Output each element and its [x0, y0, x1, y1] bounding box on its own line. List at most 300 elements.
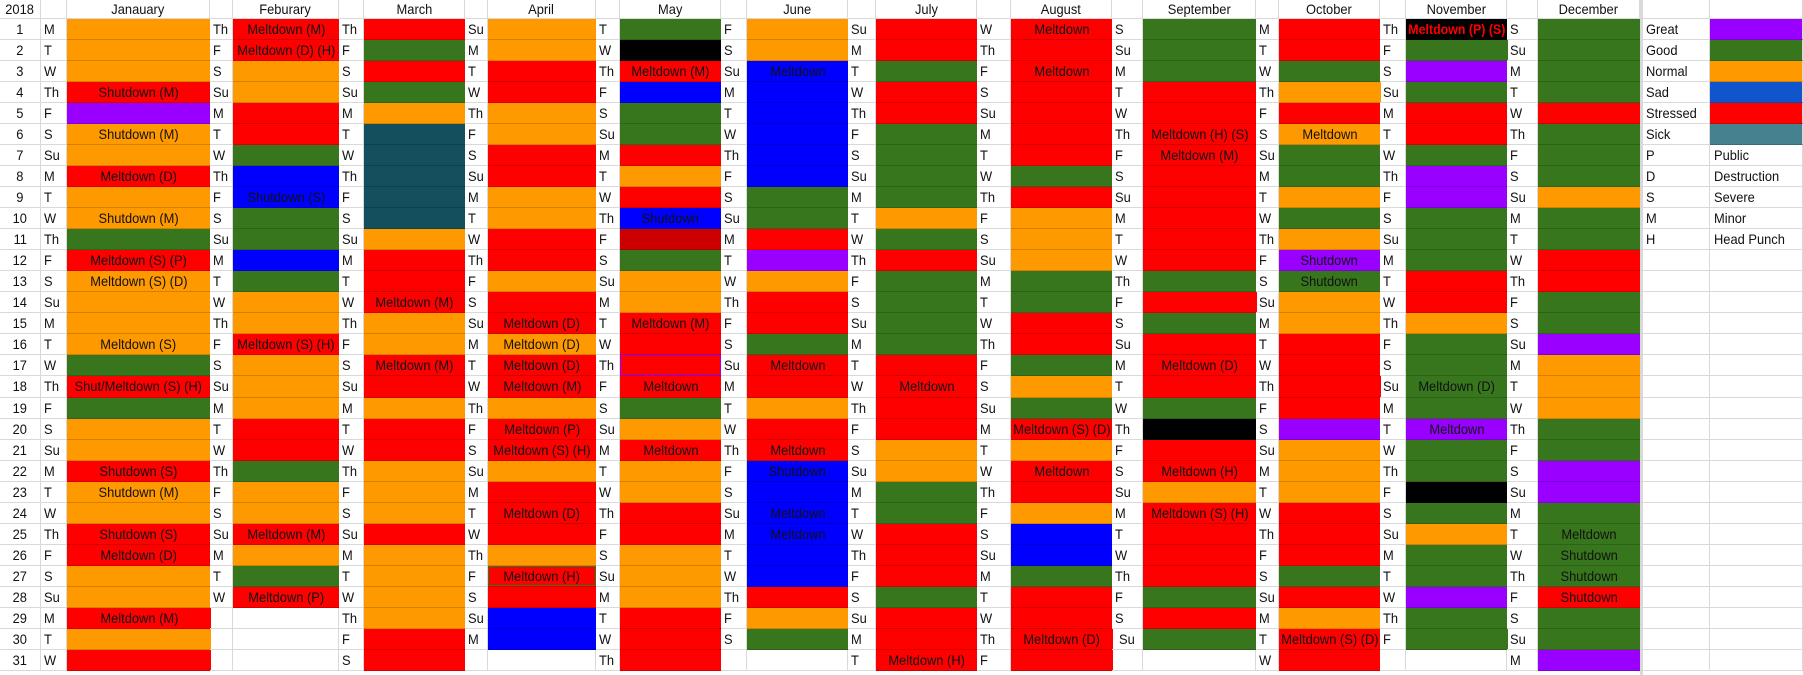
May weekdays: Su	[599, 420, 615, 436]
March weekdays: S	[342, 652, 351, 668]
row numbers column: 16	[13, 336, 27, 352]
legend labels: H	[1646, 230, 1655, 246]
November weekdays: W	[1383, 294, 1395, 310]
March weekdays: S	[342, 504, 351, 520]
February weekdays: M	[213, 400, 224, 416]
September weekdays: S	[1115, 314, 1124, 330]
October mood cells: Shutdown	[1301, 252, 1358, 268]
row numbers column: 18	[13, 378, 27, 394]
March weekdays	[339, 0, 364, 671]
March weekdays: F	[342, 336, 350, 352]
November weekdays: T	[1383, 420, 1391, 436]
May weekdays: S	[599, 104, 608, 120]
July mood cells: Meltdown (H)	[888, 652, 965, 668]
February weekdays: W	[213, 294, 225, 310]
October weekdays: M	[1259, 20, 1270, 36]
March weekdays: Th	[342, 610, 357, 626]
August mood cells: Meltdown (S) (D)	[1013, 420, 1110, 436]
September mood cells: Meltdown (M)	[1160, 146, 1238, 162]
row numbers column: 9	[16, 188, 24, 204]
August weekdays: Th	[980, 484, 995, 500]
April weekdays	[465, 0, 488, 671]
September weekdays: Th	[1115, 420, 1130, 436]
May mood cells	[620, 0, 721, 671]
August weekdays: F	[980, 210, 988, 226]
April weekdays: F	[468, 126, 476, 142]
August weekdays: W	[980, 314, 992, 330]
November weekdays: S	[1383, 62, 1392, 78]
March weekdays: M	[342, 104, 353, 120]
December weekdays: M	[1510, 504, 1521, 520]
May weekdays: W	[599, 336, 611, 352]
July weekdays: S	[851, 294, 860, 310]
April weekdays: W	[468, 526, 480, 542]
August weekdays: W	[980, 610, 992, 626]
March weekdays: F	[342, 630, 350, 646]
September weekdays: T	[1115, 526, 1123, 542]
July weekdays: T	[851, 62, 859, 78]
March weekdays: T	[342, 420, 350, 436]
December weekdays: W	[1510, 104, 1522, 120]
July weekdays: F	[851, 568, 859, 584]
February weekdays: Su	[213, 526, 229, 542]
November weekdays: T	[1383, 568, 1391, 584]
row numbers column	[0, 0, 41, 671]
May mood cells: Meltdown (M)	[631, 314, 709, 330]
January weekdays: W	[44, 356, 56, 372]
April weekdays: S	[468, 442, 477, 458]
October weekdays: W	[1259, 210, 1271, 226]
panel: April	[465, 0, 596, 671]
April mood cells: Meltdown (S) (H)	[493, 442, 591, 458]
October weekdays: Th	[1259, 84, 1274, 100]
November weekdays: Th	[1383, 314, 1398, 330]
March weekdays: Su	[342, 230, 358, 246]
August weekdays: Th	[980, 188, 995, 204]
February weekdays: Th	[213, 168, 228, 184]
November mood cells: Meltdown (D)	[1418, 378, 1495, 394]
July weekdays: W	[851, 378, 863, 394]
January weekdays: Su	[44, 588, 60, 604]
November weekdays: Th	[1383, 610, 1398, 626]
May weekdays: S	[599, 546, 608, 562]
panel: August	[977, 0, 1113, 671]
March weekdays: Th	[342, 462, 357, 478]
March weekdays: T	[342, 568, 350, 584]
August mood cells: August	[1041, 0, 1081, 16]
legend labels: P	[1646, 146, 1655, 162]
March weekdays: M	[342, 400, 353, 416]
January mood cells: Shutdown (M)	[98, 126, 179, 142]
October weekdays: S	[1259, 420, 1268, 436]
October weekdays	[1256, 0, 1279, 671]
July weekdays	[848, 0, 876, 671]
August mood cells: Meltdown (D)	[1024, 630, 1100, 646]
February weekdays: Su	[213, 378, 229, 394]
legend swatches and definitions: Destruction	[1714, 168, 1779, 184]
June mood cells: Shutdown	[769, 462, 826, 478]
July weekdays: Su	[851, 462, 867, 478]
panel: July	[848, 0, 977, 671]
November weekdays: Th	[1383, 462, 1398, 478]
September weekdays: Su	[1119, 630, 1135, 646]
February weekdays: S	[213, 62, 222, 78]
April weekdays: Th	[468, 546, 483, 562]
November weekdays: Th	[1383, 168, 1398, 184]
row numbers column: 5	[16, 104, 24, 120]
May weekdays: T	[599, 20, 607, 36]
October weekdays: Th	[1259, 230, 1274, 246]
January weekdays: M	[44, 314, 55, 330]
August weekdays	[977, 0, 1011, 671]
May weekdays: S	[599, 400, 608, 416]
April mood cells: Meltdown (D)	[504, 356, 580, 372]
April weekdays: Su	[468, 20, 484, 36]
December weekdays: M	[1510, 356, 1521, 372]
August weekdays: Su	[980, 546, 996, 562]
panel: May	[596, 0, 721, 671]
March weekdays: Su	[342, 526, 358, 542]
May weekdays: Th	[599, 356, 614, 372]
February mood cells: Shutdown (S)	[247, 188, 325, 204]
March weekdays: Su	[342, 378, 358, 394]
October weekdays: Th	[1259, 378, 1274, 394]
August weekdays: T	[980, 442, 988, 458]
March weekdays: S	[342, 62, 351, 78]
September weekdays: F	[1115, 588, 1123, 604]
July weekdays: M	[851, 484, 862, 500]
March weekdays: T	[342, 272, 350, 288]
September weekdays: F	[1115, 146, 1123, 162]
January weekdays: T	[44, 188, 52, 204]
November weekdays: Su	[1383, 378, 1399, 394]
February weekdays: M	[213, 546, 224, 562]
row numbers column: 26	[13, 546, 27, 562]
April weekdays: M	[468, 42, 479, 58]
row numbers column: 17	[13, 356, 27, 372]
July weekdays: Su	[851, 20, 867, 36]
May weekdays: M	[599, 442, 610, 458]
March weekdays: Th	[342, 168, 357, 184]
December weekdays: Th	[1510, 568, 1525, 584]
March weekdays: T	[342, 126, 350, 142]
November weekdays: F	[1383, 630, 1391, 646]
August weekdays: Th	[980, 630, 995, 646]
August weekdays: S	[980, 230, 989, 246]
January weekdays: Th	[44, 230, 59, 246]
October mood cells	[1279, 0, 1381, 671]
April weekdays: T	[468, 62, 476, 78]
April weekdays: Th	[468, 252, 483, 268]
October mood cells: Meltdown (S) (D)	[1281, 630, 1378, 646]
December weekdays: Su	[1510, 188, 1526, 204]
April weekdays: Su	[468, 314, 484, 330]
row numbers column: 4	[16, 84, 24, 100]
September mood cells: Meltdown (S) (H)	[1151, 504, 1248, 520]
December weekdays: S	[1510, 462, 1519, 478]
April weekdays: Th	[468, 400, 483, 416]
January mood cells: Meltdown (D)	[100, 546, 177, 562]
September mood cells: Meltdown (D)	[1161, 356, 1238, 372]
January weekdays: S	[44, 568, 53, 584]
June mood cells: Meltdown	[770, 526, 825, 542]
January weekdays: Th	[44, 526, 59, 542]
May mood cells: May	[658, 0, 682, 16]
September weekdays: S	[1115, 20, 1124, 36]
September weekdays: T	[1115, 84, 1123, 100]
February weekdays: Th	[213, 20, 228, 36]
row numbers column: 31	[13, 652, 27, 668]
legend labels: M	[1646, 210, 1657, 226]
December weekdays: W	[1510, 546, 1522, 562]
April weekdays: F	[468, 420, 476, 436]
September weekdays: T	[1115, 378, 1123, 394]
January weekdays: F	[44, 252, 52, 268]
January weekdays: T	[44, 484, 52, 500]
October weekdays: T	[1259, 42, 1267, 58]
July weekdays: T	[851, 210, 859, 226]
June weekdays: Su	[724, 210, 740, 226]
April weekdays: T	[468, 356, 476, 372]
May weekdays: Th	[599, 504, 614, 520]
August weekdays: S	[980, 378, 989, 394]
December weekdays: S	[1510, 314, 1519, 330]
May mood cells: Meltdown	[643, 442, 698, 458]
January weekdays: Su	[44, 294, 60, 310]
April weekdays: Su	[468, 168, 484, 184]
row numbers column: 24	[13, 504, 27, 520]
December weekdays: T	[1510, 230, 1518, 246]
September weekdays: M	[1115, 62, 1126, 78]
November weekdays	[1380, 0, 1406, 671]
September weekdays: Su	[1115, 336, 1131, 352]
February weekdays: S	[213, 504, 222, 520]
September mood cells: September	[1167, 0, 1230, 16]
October weekdays: Su	[1259, 294, 1275, 310]
May weekdays: W	[599, 42, 611, 58]
March weekdays: M	[342, 252, 353, 268]
January weekdays: F	[44, 400, 52, 416]
April mood cells: Meltdown (H)	[504, 568, 580, 584]
May weekdays: S	[599, 252, 608, 268]
July weekdays: S	[851, 146, 860, 162]
February mood cells: Feburary	[260, 0, 311, 16]
April mood cells: Meltdown (M)	[503, 378, 581, 394]
May weekdays: Th	[599, 210, 614, 226]
July weekdays: M	[851, 630, 862, 646]
February weekdays: S	[213, 210, 222, 226]
February mood cells: Meltdown (S) (H)	[237, 336, 335, 352]
November weekdays: S	[1383, 210, 1392, 226]
June weekdays: M	[724, 378, 735, 394]
March weekdays: Su	[342, 84, 358, 100]
December weekdays	[1507, 0, 1538, 671]
February weekdays: W	[213, 146, 225, 162]
February mood cells	[233, 0, 339, 671]
May weekdays: Th	[599, 62, 614, 78]
May weekdays: F	[599, 84, 607, 100]
October weekdays: S	[1259, 272, 1268, 288]
May weekdays: F	[599, 230, 607, 246]
June mood cells: June	[783, 0, 811, 16]
November weekdays: W	[1383, 588, 1395, 604]
February weekdays: Th	[213, 314, 228, 330]
row numbers column: 20	[13, 420, 27, 436]
November weekdays: S	[1383, 356, 1392, 372]
September weekdays: S	[1115, 168, 1124, 184]
row numbers column: 11	[13, 230, 27, 246]
June weekdays: S	[724, 336, 733, 352]
October weekdays: T	[1259, 188, 1267, 204]
November weekdays: W	[1383, 146, 1395, 162]
December weekdays: F	[1510, 442, 1518, 458]
panel: September	[1112, 0, 1257, 671]
August mood cells: Meltdown	[1034, 20, 1089, 36]
legend swatches and definitions: Severe	[1714, 188, 1755, 204]
December mood cells: Meltdown	[1561, 526, 1617, 542]
January weekdays: W	[44, 652, 56, 668]
June weekdays: Th	[724, 294, 739, 310]
legend labels: D	[1646, 168, 1655, 184]
April weekdays: W	[468, 230, 480, 246]
July weekdays: Su	[851, 610, 867, 626]
September weekdays: M	[1115, 504, 1126, 520]
January mood cells: Shutdown (S)	[99, 462, 178, 478]
March weekdays: M	[342, 546, 353, 562]
November weekdays: F	[1383, 42, 1391, 58]
July weekdays: M	[851, 336, 862, 352]
June weekdays: Th	[724, 442, 739, 458]
June weekdays: W	[724, 420, 736, 436]
November mood cells: Meltdown (P) (S)	[1408, 20, 1505, 36]
July weekdays: T	[851, 504, 859, 520]
January weekdays: M	[44, 610, 55, 626]
May weekdays: M	[599, 294, 610, 310]
July weekdays: S	[851, 442, 860, 458]
May weekdays: M	[599, 146, 610, 162]
May mood cells: Shutdown	[642, 210, 699, 226]
row numbers column: 30	[13, 630, 27, 646]
panel: January	[41, 0, 211, 671]
January mood cells: Meltdown (S) (D)	[90, 272, 187, 288]
February weekdays: T	[213, 126, 221, 142]
January weekdays: M	[44, 462, 55, 478]
October weekdays: T	[1259, 336, 1267, 352]
June mood cells: Meltdown	[770, 504, 825, 520]
June weekdays: W	[724, 126, 736, 142]
August weekdays: M	[980, 126, 991, 142]
September weekdays: W	[1115, 104, 1127, 120]
July weekdays: W	[851, 526, 863, 542]
January mood cells: Shutdown (S)	[99, 526, 178, 542]
July weekdays: M	[851, 188, 862, 204]
October weekdays: Su	[1259, 146, 1275, 162]
legend labels: S	[1646, 188, 1655, 204]
January mood cells: Shut/Meltdown (S) (H)	[75, 378, 202, 394]
November weekdays: Su	[1383, 526, 1399, 542]
January weekdays: W	[44, 62, 56, 78]
July weekdays: F	[851, 272, 859, 288]
January weekdays: M	[44, 20, 55, 36]
December weekdays: S	[1510, 610, 1519, 626]
August weekdays: M	[980, 420, 991, 436]
March mood cells: March	[396, 0, 432, 16]
row numbers column: 2	[16, 42, 24, 58]
row numbers column: 29	[13, 610, 27, 626]
December weekdays: M	[1510, 652, 1521, 668]
April weekdays: W	[468, 378, 480, 394]
May weekdays: Su	[599, 126, 615, 142]
row numbers column: 3	[16, 62, 24, 78]
May weekdays: T	[599, 314, 607, 330]
row numbers column: 19	[13, 400, 27, 416]
November weekdays: M	[1383, 400, 1394, 416]
panel: March	[339, 0, 465, 671]
January weekdays: S	[44, 420, 53, 436]
June mood cells	[747, 0, 848, 671]
October weekdays: W	[1259, 652, 1271, 668]
panel: October	[1256, 0, 1381, 671]
August weekdays: W	[980, 168, 992, 184]
January weekdays: W	[44, 504, 56, 520]
October weekdays: F	[1259, 400, 1267, 416]
October weekdays: W	[1259, 62, 1271, 78]
August weekdays: S	[980, 84, 989, 100]
August weekdays: M	[980, 272, 991, 288]
August weekdays: Su	[980, 104, 996, 120]
September mood cells: Meltdown (H)	[1161, 462, 1238, 478]
September weekdays: Th	[1115, 568, 1130, 584]
March weekdays: W	[342, 588, 354, 604]
July weekdays: W	[851, 230, 863, 246]
July weekdays: S	[851, 588, 860, 604]
August weekdays: W	[980, 462, 992, 478]
October weekdays: M	[1259, 462, 1270, 478]
July mood cells: July	[915, 0, 937, 16]
June mood cells: Meltdown	[770, 62, 825, 78]
October mood cells: October	[1306, 0, 1352, 16]
March weekdays: S	[342, 356, 351, 372]
February weekdays: Su	[213, 230, 229, 246]
January weekdays: T	[44, 336, 52, 352]
December weekdays: Th	[1510, 420, 1525, 436]
August weekdays: Su	[980, 400, 996, 416]
December weekdays: W	[1510, 252, 1522, 268]
December weekdays: Su	[1510, 630, 1526, 646]
June weekdays: Su	[724, 62, 740, 78]
legend labels: Great	[1646, 20, 1678, 36]
July weekdays: Th	[851, 104, 866, 120]
March mood cells	[364, 0, 465, 671]
March weekdays: W	[342, 294, 354, 310]
May weekdays: W	[599, 188, 611, 204]
September weekdays: M	[1115, 210, 1126, 226]
May weekdays	[596, 0, 620, 671]
April mood cells: Meltdown (D)	[504, 336, 580, 352]
panel: November	[1380, 0, 1508, 671]
June weekdays: Th	[724, 146, 739, 162]
row numbers column: 7	[16, 146, 24, 162]
October weekdays: M	[1259, 610, 1270, 626]
January weekdays: Su	[44, 442, 60, 458]
April weekdays: S	[468, 146, 477, 162]
May weekdays: W	[599, 484, 611, 500]
April weekdays: W	[468, 84, 480, 100]
October weekdays: W	[1259, 504, 1271, 520]
October weekdays: F	[1259, 104, 1267, 120]
August weekdays: F	[980, 652, 988, 668]
legend labels: Normal	[1646, 62, 1688, 78]
